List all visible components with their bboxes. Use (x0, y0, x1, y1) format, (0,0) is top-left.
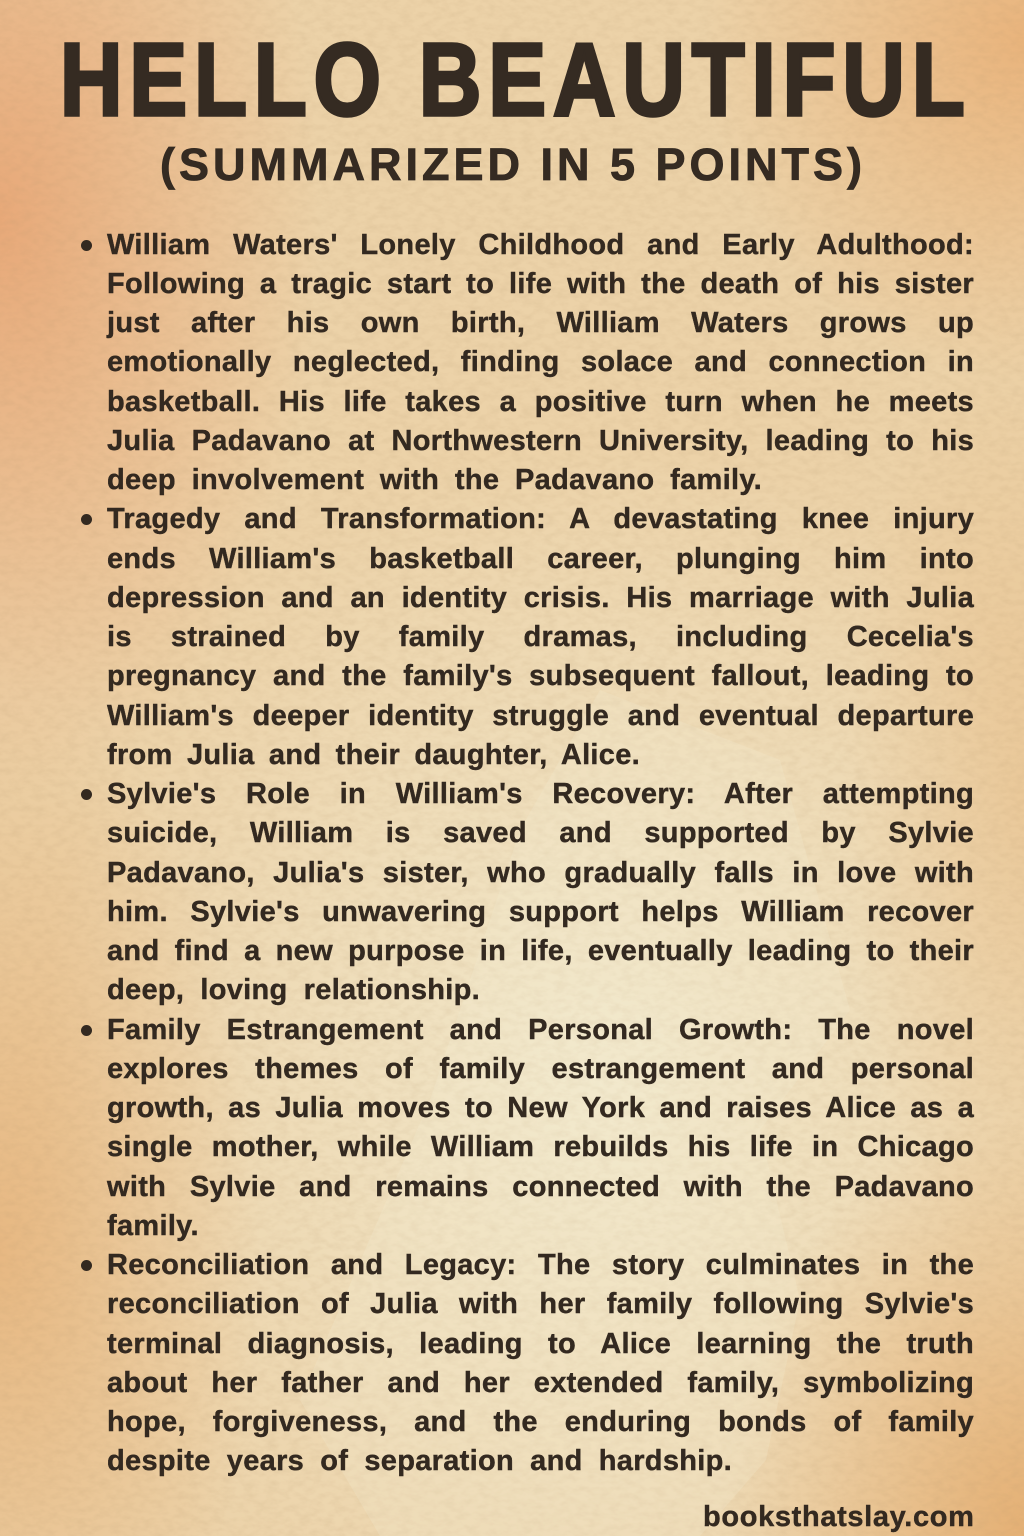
point 2: Tragedy and Transformation: Tragedy and Transformation: A devastating knee injury (107, 503, 974, 535)
point 3: Sylvie's Role in William's Recovery: suicide, William is saved and supported by Sylvie (107, 817, 974, 849)
point 2: Tragedy and Transformation: pregnancy and the family's subsequent fallout, leading to (107, 660, 974, 692)
point 2: Tragedy and Transformation: ends William's basketball career, plunging him into (107, 542, 974, 574)
point 1: William Waters' Lonely Childhood and Early Adulthood (81, 228, 974, 496)
point 1: William Waters' Lonely Childhood and Early Adulthood: Julia Padavano at Northwestern University, leading to his (107, 425, 974, 457)
point 3: Sylvie's Role in William's Recovery: and find a new purpose in life, eventually leading to their (107, 935, 974, 967)
point 2: Tragedy and Transformation: is strained by family dramas, including Cecelia's (107, 621, 974, 653)
point 3: Sylvie's Role in William's Recovery: Sylvie's Role in William's Recovery: After attempting (107, 778, 974, 810)
point 4: Family Estrangement and Personal Growth: explores themes of family estrangement and personal (107, 1053, 974, 1085)
point 1: William Waters' Lonely Childhood and Early Adulthood: William Waters' Lonely Childhood and Early Adulthood: (107, 228, 974, 260)
point 1: William Waters' Lonely Childhood and Early Adulthood: Following a tragic start to life with the death of his sister (107, 268, 974, 300)
point 2: Tragedy and Transformation: depression and an identity crisis. His marriage with Julia (107, 582, 974, 614)
point 5: Reconciliation and Legacy: about her father and her extended family, symbolizing (107, 1367, 974, 1399)
point 2: Tragedy and Transformation: from Julia and their daughter, Alice. (107, 739, 640, 771)
point 1: William Waters' Lonely Childhood and Early Adulthood: just after his own birth, William Waters grows up (107, 307, 974, 339)
point 3: Sylvie's Role in William's Recovery (81, 778, 974, 1006)
point 4: Family Estrangement and Personal Growth (81, 1014, 974, 1242)
point 3: Sylvie's Role in William's Recovery: Padavano, Julia's sister, who gradually falls in love with (107, 856, 974, 888)
point 1: William Waters' Lonely Childhood and Early Adulthood: deep involvement with the Padavano family. (107, 464, 762, 496)
point 4: Family Estrangement and Personal Growth: family. (107, 1210, 199, 1242)
point 3: Sylvie's Role in William's Recovery: him. Sylvie's unwavering support helps William recover (107, 896, 974, 928)
point 1: William Waters' Lonely Childhood and Early Adulthood: basketball. His life takes a positive turn when he meets (107, 386, 974, 418)
point 4: Family Estrangement and Personal Growth: Family Estrangement and Personal Growth: The novel (107, 1014, 974, 1046)
point 4: Family Estrangement and Personal Growth: growth, as Julia moves to New York and raises Alice as a (107, 1092, 974, 1124)
point 5: Reconciliation and Legacy (81, 1249, 974, 1477)
subtitle: (SUMMARIZED IN 5 POINTS) (160, 139, 862, 190)
point 4: Family Estrangement and Personal Growth: single mother, while William rebuilds his life in Chicago (107, 1131, 974, 1163)
point 5: Reconciliation and Legacy: hope, forgiveness, and the enduring bonds of family (107, 1406, 974, 1438)
point 1: William Waters' Lonely Childhood and Early Adulthood: emotionally neglected, finding solace and connection in (107, 346, 974, 378)
point 5: Reconciliation and Legacy: Reconciliation and Legacy: The story culminates in the (107, 1249, 974, 1281)
website credit: booksthatslay.com (703, 1501, 975, 1533)
point 2: Tragedy and Transformation (81, 503, 974, 771)
point 3: Sylvie's Role in William's Recovery: deep, loving relationship. (107, 974, 480, 1006)
point 2: Tragedy and Transformation: William's deeper identity struggle and eventual departure (107, 700, 974, 732)
point 5: Reconciliation and Legacy: reconciliation of Julia with her family following Sylvie's (107, 1288, 974, 1320)
point 4: Family Estrangement and Personal Growth: with Sylvie and remains connected with the Padavano (107, 1170, 974, 1202)
point 5: Reconciliation and Legacy: despite years of separation and hardship. (107, 1445, 732, 1477)
point 5: Reconciliation and Legacy: terminal diagnosis, leading to Alice learning the truth (107, 1328, 974, 1360)
